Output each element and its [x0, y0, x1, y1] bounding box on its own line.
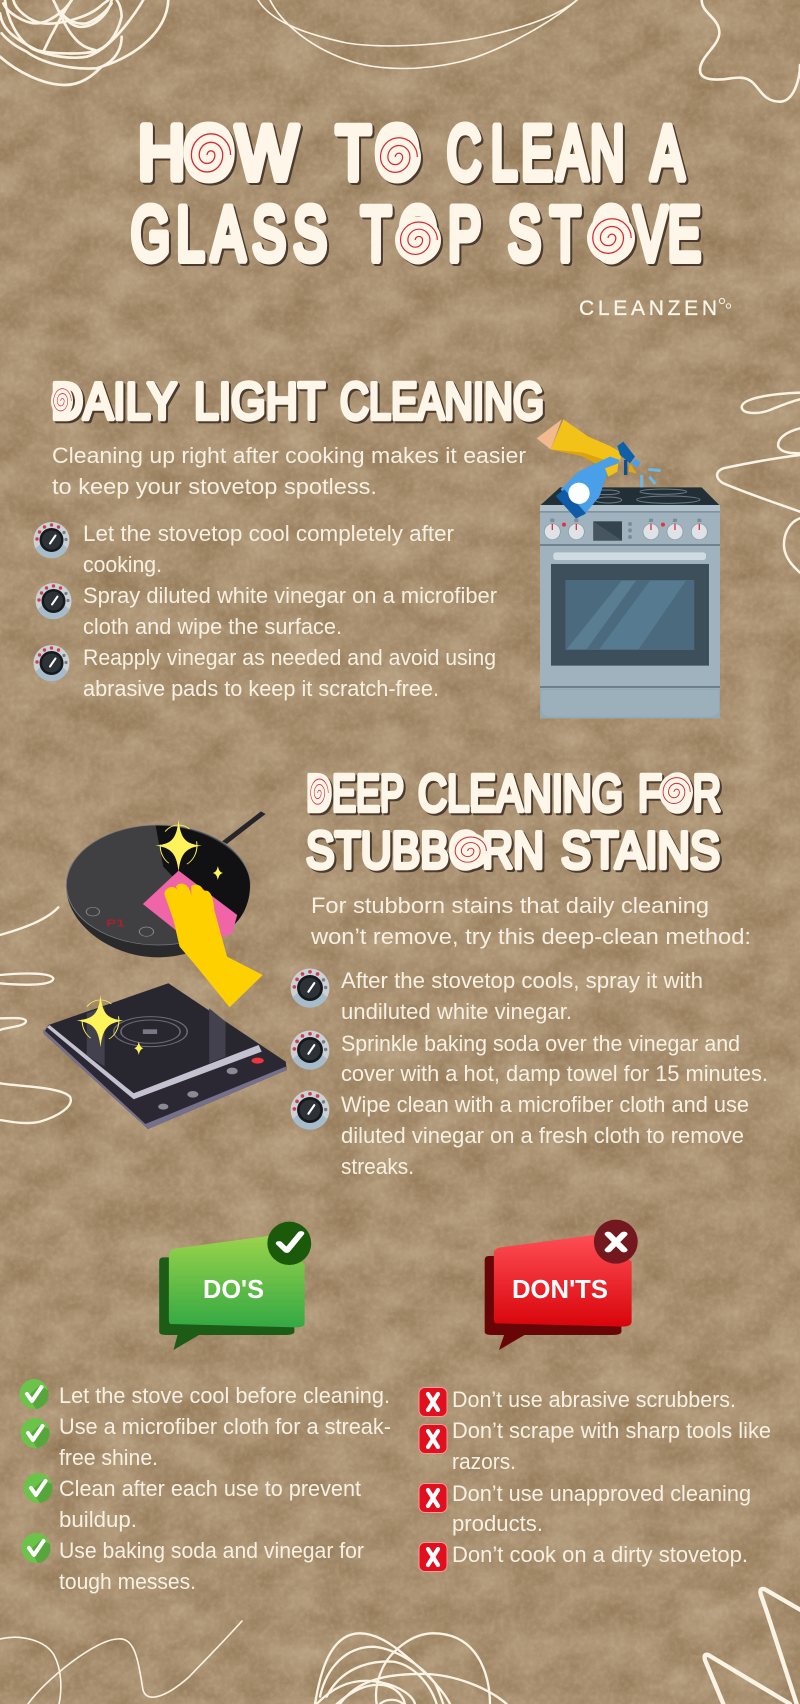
deep cleaning intro text: won’t remove, try this deep-clean method: [310, 924, 751, 949]
sparkle [77, 995, 123, 1047]
pan handle [224, 813, 263, 843]
do item 1: Let the stove cool before cleaning. [59, 1383, 390, 1408]
do item 2: free shine. [59, 1445, 158, 1470]
daily step 3: abrasive pads to keep it scratch-free. [83, 676, 439, 701]
title: TO [336, 111, 419, 196]
spray bottle and gloved hand [537, 419, 661, 519]
badge: don'ts: DON'TS [512, 1274, 608, 1304]
heading: deep cleaning for stubborn stains [306, 765, 721, 880]
pink cloth [143, 871, 237, 947]
small sparkle [213, 866, 223, 880]
icon: stove knob [291, 1031, 329, 1070]
don't item 2 [419, 1418, 771, 1474]
deep step 3: diluted vinegar on a fresh cloth to remove [341, 1123, 744, 1148]
heading: daily light cleaning: CLEANING [340, 373, 544, 431]
do item 3 [24, 1473, 361, 1532]
don't item 3: products. [452, 1511, 543, 1536]
scribble: bottom right [705, 1589, 800, 1704]
daily step 1 [34, 521, 454, 577]
oven handle [553, 552, 706, 560]
heading: daily light cleaning: DAILY [51, 373, 177, 431]
icon: stove knob [291, 969, 329, 1008]
daily step 1: Let the stovetop cool completely after [83, 521, 454, 546]
stove body [540, 505, 720, 718]
don't item 3 [419, 1481, 751, 1536]
cooktop glass surface [49, 984, 258, 1093]
deep step 3 [291, 1091, 749, 1179]
deep step 1 [291, 968, 703, 1024]
do item 3: Clean after each use to prevent [59, 1476, 361, 1501]
deep step 2 [291, 1031, 768, 1086]
scribble: top left [0, 0, 168, 85]
deep cleaning intro text: For stubborn stains that daily cleaning [311, 893, 709, 918]
badge: do's [159, 1222, 311, 1350]
yellow glove [164, 884, 263, 1007]
don't item 4: Don’t cook on a dirty stovetop. [452, 1542, 748, 1567]
daily step 3: Reapply vinegar as needed and avoid using [83, 645, 496, 670]
title [131, 110, 701, 277]
title: A [651, 110, 684, 196]
don't item 3: Don’t use unapproved cleaning [452, 1481, 751, 1506]
icon: green check [24, 1473, 53, 1503]
title: HOW [138, 111, 298, 196]
icon: stove knob [36, 583, 72, 619]
scribble: top centre [258, 0, 577, 68]
oven door window [551, 564, 709, 666]
daily cleaning intro text: Cleaning up right after cooking makes it easier [52, 443, 526, 468]
daily cleaning intro text: to keep your stovetop spotless. [52, 474, 377, 499]
deep step 3: Wipe clean with a microfiber cloth and use [341, 1092, 749, 1117]
do item 4 [22, 1533, 364, 1594]
icon: red cross [419, 1542, 447, 1572]
scribble: bottom centre [315, 1633, 507, 1704]
do item 3: buildup. [59, 1507, 137, 1532]
icon: stove knob [34, 522, 70, 558]
do item 2 [20, 1414, 391, 1470]
do item 4: Use baking soda and vinegar for [59, 1538, 364, 1563]
round cooktop surface: P1 [106, 917, 125, 929]
title: CLEAN [447, 112, 624, 196]
do item 4: tough messes. [59, 1569, 196, 1594]
deep step 2: cover with a hot, damp towel for 15 minutes. [341, 1061, 768, 1086]
deep step 1: After the stovetop cools, spray it with [341, 968, 703, 993]
icon: green check [22, 1533, 51, 1563]
stove cooktop [541, 487, 719, 505]
icon: red cross [419, 1388, 447, 1416]
badge: do's: DO'S [203, 1274, 264, 1304]
control buttons [158, 1058, 264, 1110]
deep cleaning intro text [310, 893, 751, 949]
heading: daily light cleaning [51, 373, 544, 431]
icon: green check [20, 1379, 49, 1409]
icon: green check [20, 1418, 50, 1448]
round cooktop base [66, 887, 250, 957]
silver strip [47, 1025, 262, 1099]
daily step 2 [36, 583, 497, 639]
icon: stove knob [291, 1091, 329, 1130]
title: TOP [361, 191, 481, 277]
daily step 3 [34, 645, 496, 701]
scribble: bottom left [0, 1621, 242, 1704]
don't item 2: razors. [452, 1449, 516, 1474]
icon: red cross [419, 1424, 447, 1454]
illustration: stove with spray bottle [537, 419, 720, 718]
illustration: round cooktop being wiped [66, 813, 263, 1007]
daily cleaning intro text [52, 443, 526, 499]
icon: stove knob [34, 645, 70, 681]
scribble: top right [700, 0, 800, 102]
deep step 1: undiluted white vinegar. [341, 999, 572, 1024]
don't item 2: Don’t scrape with sharp tools like [452, 1418, 771, 1443]
daily step 2: Spray diluted white vinegar on a microfiber [83, 583, 497, 608]
heading: deep cleaning for stubborn stains: DEEP [306, 765, 404, 823]
stove control panel [544, 519, 707, 541]
title: GLASS [131, 192, 327, 277]
title: STOVE [508, 191, 701, 277]
scribble: left side [0, 907, 71, 1123]
illustration: induction cooktop [43, 983, 287, 1129]
heading: deep cleaning for stubborn stains: STAINS [561, 822, 720, 880]
round cooktop surface [66, 825, 250, 945]
heading: deep cleaning for stubborn stains: FOR [638, 765, 721, 823]
do item 2: Use a microfiber cloth for a streak- [59, 1414, 391, 1439]
daily step 2: cloth and wipe the surface. [83, 614, 342, 639]
small sparkle [134, 1042, 143, 1055]
badge: don'ts [485, 1220, 638, 1350]
brand logo: Cleanzen: CLEANZEN [579, 297, 717, 320]
icon: red cross [419, 1484, 447, 1512]
heading: deep cleaning for stubborn stains: STUBBORN [306, 822, 544, 880]
cooktop body [43, 983, 287, 1129]
sparkle [155, 819, 202, 872]
don't item 1: Don’t use abrasive scrubbers. [452, 1387, 736, 1412]
heading: deep cleaning for stubborn stains: CLEANING [418, 765, 623, 823]
deep step 2: Sprinkle baking soda over the vinegar and [341, 1031, 740, 1056]
daily step 1: cooking. [83, 552, 162, 577]
scribble: right side [717, 393, 800, 573]
heading: daily light cleaning: LIGHT [194, 373, 325, 431]
deep step 3: streaks. [341, 1154, 414, 1179]
